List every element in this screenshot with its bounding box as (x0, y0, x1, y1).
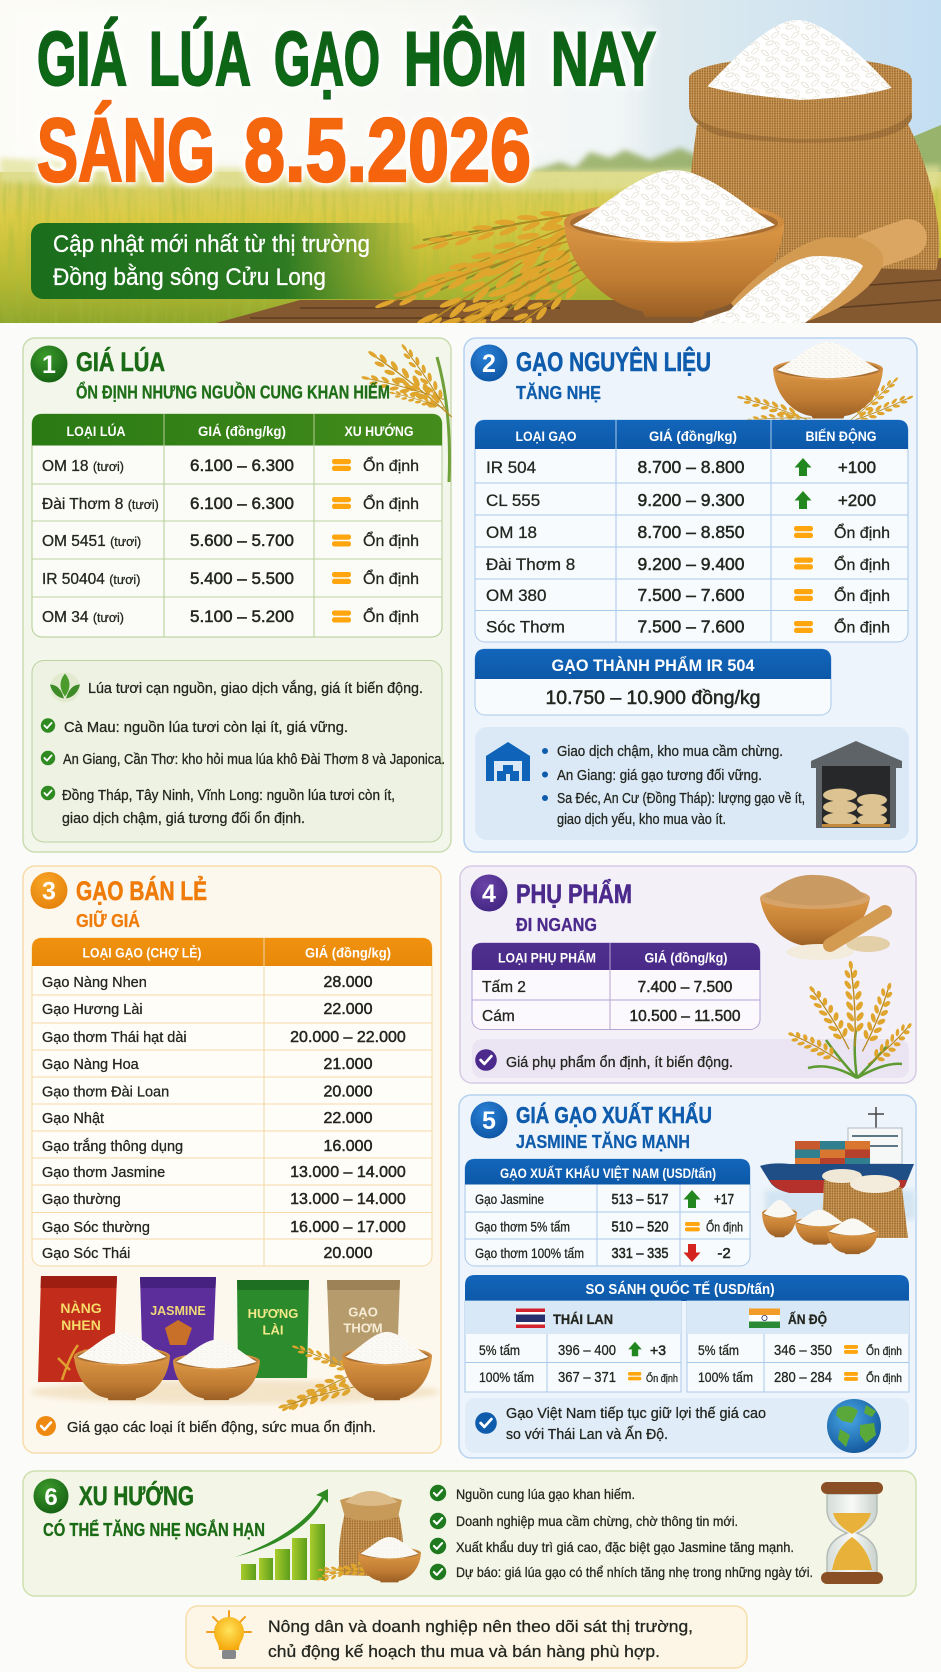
row Gạo trắng thông dụng: Gạo trắng thông dụng (42, 1138, 183, 1155)
bullet list: Giao dịch chậm, kho mua cầm chừng. (557, 744, 783, 760)
row Sóc Thơm: Sóc Thơm (486, 618, 565, 636)
row Đài Thơm 8: Đài Thơm 8 (486, 555, 575, 574)
hero title line 2: SÁNG (37, 100, 215, 201)
row Gạo Nàng Nhen (42, 974, 373, 991)
bullet Cà Mau: Cà Mau: nguồn lúa tươi còn lại ít, giá vững. (64, 720, 348, 736)
row OM 34: Ổn định (363, 607, 419, 626)
row Cám: Cám (482, 1008, 515, 1025)
note: so với Thái Lan và Ấn Độ. (506, 1426, 668, 1443)
badge 4: 4 (482, 880, 496, 908)
India column: 280 – 284 (774, 1370, 832, 1386)
panel 3: gạo bán lẻ (23, 866, 441, 1453)
rice plant (785, 960, 921, 1078)
sack and bowl illustration (315, 1491, 421, 1583)
row OM 34: 5.100 – 5.200 (190, 607, 294, 626)
international comparison table (465, 1275, 909, 1392)
row Đài Thơm 8: Ổn định (363, 494, 419, 513)
row Gạo thường: Gạo thường (42, 1192, 121, 1208)
table header (516, 427, 877, 444)
row Gạo Nàng Nhen: 28.000 (324, 974, 373, 991)
India column: Ổn định (866, 1343, 902, 1358)
note box: Lúa tươi cạn nguồn, giao dịch vắng, giá ít biến động. (88, 680, 423, 697)
row Gạo thơm Thái hạt dài: 20.000 – 22.000 (290, 1029, 406, 1046)
row Đài Thơm 8: 6.100 – 6.300 (190, 494, 294, 513)
hero title line 1: GẠO (274, 17, 380, 102)
tip text (268, 1617, 693, 1661)
bag: Jasmine (140, 1277, 216, 1380)
row CL 555: 9.200 – 9.300 (637, 490, 745, 510)
badge 6: 6 (44, 1484, 58, 1511)
subheading: TĂNG NHẸ (516, 382, 601, 403)
hero subtitle box (31, 223, 420, 299)
badge 2 (470, 344, 508, 382)
hero title line 2: 8.5.2026 (244, 101, 531, 201)
icon: hourglass (821, 1482, 883, 1584)
note box (475, 727, 909, 840)
row Gạo Hương Lài: Gạo Hương Lài (42, 1002, 143, 1018)
row Gạo Jasmine: 513 – 517 (612, 1191, 668, 1208)
rice bags and bowls illustration (30, 1276, 440, 1415)
bullet list: giao dịch yếu, kho mua vào ít. (557, 812, 726, 828)
subheading: ĐI NGANG (516, 915, 597, 935)
row CL 555: +200 (838, 491, 876, 510)
row Sóc Thơm: 7.500 – 7.600 (637, 616, 745, 636)
note: Giá gạo các loại ít biến động, sức mua ổn định. (67, 1419, 376, 1436)
heading: GẠO BÁN LẺ (76, 874, 207, 906)
row Cám: 10.500 – 11.500 (630, 1008, 741, 1025)
Thailand column: 5% tấm (479, 1343, 520, 1358)
Vietnam export table (465, 1159, 750, 1266)
row Đài Thơm 8: 9.200 – 9.400 (637, 554, 745, 574)
row OM 380: OM 380 (486, 586, 546, 605)
wooden scoop with rice (692, 237, 908, 323)
burlap sacks (822, 1169, 908, 1238)
row Đài Thơm 8 (42, 494, 419, 513)
heading: PHỤ PHẨM (516, 878, 632, 909)
Thailand column (479, 1308, 678, 1386)
note box (32, 660, 445, 842)
bag: Hương Lài: HƯƠNG (248, 1306, 298, 1321)
hero title line 1: HÔM (404, 17, 527, 102)
row Sóc Thơm: Ổn định (834, 618, 890, 636)
table header: LOẠI GẠO (CHỢ LẺ) (82, 944, 202, 960)
note: Gạo Việt Nam tiếp tục giữ lợi thế giá cao (506, 1405, 766, 1422)
row IR 50404: IR 50404 (tươi) (42, 571, 140, 588)
bag: Nàng Nhen (38, 1276, 117, 1382)
row Gạo thường (42, 1191, 406, 1208)
badge 3: 3 (42, 878, 56, 906)
hero banner (0, 0, 941, 323)
bullet 4: Dự báo: giá lúa gạo có thể nhích tăng nhẹ trong những ngày tới. (456, 1564, 813, 1580)
panel 6: xu hướng (23, 1471, 916, 1596)
row CL 555 (486, 490, 876, 510)
bowls (74, 1332, 170, 1400)
row OM 380 (486, 585, 890, 605)
bullet list: Sa Đéc, An Cư (Đồng Tháp): lượng gạo về ít, (557, 791, 805, 807)
row Gạo Sóc Thái: Gạo Sóc Thái (42, 1246, 130, 1262)
heading: XU HƯỚNG (79, 1480, 194, 1511)
India column: 5% tấm (698, 1343, 739, 1358)
row Gạo Nàng Hoa: 21.000 (324, 1056, 373, 1073)
finished rice IR 504 box: GẠO THÀNH PHẨM IR 504 (552, 656, 755, 675)
row Gạo Nhật: Gạo Nhật (42, 1111, 104, 1127)
hero title line 1: NAY (551, 17, 656, 102)
row IR 504: 8.700 – 8.800 (637, 457, 745, 477)
finished rice IR 504 box (475, 649, 831, 715)
row Gạo trắng thông dụng (42, 1138, 373, 1155)
icon: globe (827, 1399, 881, 1453)
bullet 3: Xuất khẩu duy trì giá cao, đặc biệt gạo Jasmine tăng mạnh. (456, 1539, 794, 1555)
bag: Nàng Nhen: NHEN (61, 1317, 101, 1333)
bullet Đồng Tháp: giao dịch chậm, giá tương đối ổn định. (62, 811, 305, 827)
table header: XU HƯỚNG (344, 422, 414, 439)
row Gạo Nàng Nhen: Gạo Nàng Nhen (42, 975, 147, 991)
bran bowl with scoop (760, 875, 890, 960)
row IR 504 (486, 457, 876, 477)
retail price table (32, 938, 432, 1266)
icon: leaf (50, 672, 80, 702)
bullet An Giang: An Giang, Cần Thơ: kho hỏi mua lúa khô Đài Thơm 8 và Japonica. (63, 752, 445, 768)
row OM 18 (42, 456, 419, 475)
subheading: CÓ THỂ TĂNG NHẸ NGẮN HẠN (43, 1519, 265, 1540)
subheading: GIỮ GIÁ (76, 910, 140, 931)
badge 4 (470, 874, 508, 912)
row Gạo thơm 5% tấm: Ổn định (706, 1220, 743, 1234)
India column: 100% tấm (698, 1370, 753, 1385)
row Gạo thơm 100% tấm (475, 1244, 731, 1262)
bag: Nàng Nhen: NÀNG (60, 1300, 102, 1316)
row CL 555: CL 555 (486, 491, 540, 510)
row Gạo thơm Đài Loan (42, 1084, 373, 1100)
row IR 50404 (42, 569, 419, 588)
warehouse illustration (811, 741, 902, 828)
row OM 5451: OM 5451 (tươi) (42, 533, 141, 550)
subheading: ỔN ĐỊNH NHƯNG NGUỒN CUNG KHAN HIẾM (76, 382, 390, 402)
flag: Thailand (516, 1308, 545, 1328)
subheading: JASMINE TĂNG MẠNH (516, 1131, 690, 1152)
row IR 504: IR 504 (486, 458, 536, 477)
table header: GẠO XUẤT KHẨU VIỆT NAM (USD/tấn) (500, 1164, 716, 1181)
row OM 18 (486, 522, 890, 542)
row Gạo thơm 5% tấm: 510 – 520 (612, 1218, 668, 1236)
table header: LOẠI GẠO (516, 428, 577, 444)
India column: 346 – 350 (774, 1343, 832, 1359)
footer tip box (186, 1606, 747, 1668)
panel 4: phụ phẩm (460, 866, 921, 1083)
bullet list (430, 1485, 813, 1580)
note: Giá phụ phẩm ổn định, ít biến động. (506, 1054, 733, 1071)
heading: GẠO NGUYÊN LIỆU (516, 346, 711, 377)
heading: GIÁ LÚA (76, 346, 165, 377)
bag: Jasmine: JASMINE (150, 1304, 206, 1318)
wheat decoration (360, 337, 457, 482)
India column: Ổn định (866, 1370, 902, 1385)
table header: GIÁ (đồng/kg) (644, 950, 728, 966)
table header (498, 948, 728, 966)
growth arrow (235, 1489, 328, 1557)
row Gạo thơm 5% tấm (475, 1218, 743, 1236)
row Cám (482, 1008, 741, 1025)
bullet Đồng Tháp (41, 786, 395, 827)
row Gạo thơm 100% tấm: -2 (717, 1245, 731, 1262)
row Đài Thơm 8: Đài Thơm 8 (tươi) (42, 496, 159, 513)
tip text: chủ động kế hoạch thu mua và bán hàng phù hợp. (268, 1642, 660, 1661)
row OM 5451 (42, 531, 419, 550)
row IR 50404: 5.400 – 5.500 (190, 569, 294, 588)
hero title line 1: LÚA (149, 17, 251, 102)
row Gạo Hương Lài (42, 1001, 373, 1018)
badge 5 (470, 1102, 508, 1138)
bowl 3 (827, 1218, 878, 1254)
hero title line 2 (37, 100, 531, 201)
Thailand column: 396 – 400 (558, 1343, 616, 1359)
badge 1 (30, 346, 68, 382)
India column: ẤN ĐỘ (788, 1310, 827, 1327)
badge 3 (30, 872, 68, 909)
row OM 18: 8.700 – 8.850 (637, 522, 745, 542)
badge 2: 2 (482, 350, 496, 378)
row Gạo Nàng Hoa: Gạo Nàng Hoa (42, 1057, 140, 1073)
row Gạo thơm Jasmine: 13.000 – 14.000 (290, 1164, 406, 1181)
note (465, 1398, 909, 1453)
bag: Gạo Thơm: THƠM (343, 1320, 383, 1336)
row Gạo Sóc thường (42, 1219, 406, 1236)
row Sóc Thơm (486, 616, 890, 636)
row Gạo thơm Thái hạt dài: Gạo thơm Thái hạt dài (42, 1030, 187, 1046)
row Gạo Jasmine (475, 1190, 734, 1208)
wooden bowl of rice (564, 170, 784, 317)
row OM 18: OM 18 (tươi) (42, 458, 124, 475)
row Gạo Nhật (42, 1110, 373, 1127)
table header: SO SÁNH QUỐC TẾ (USD/tấn) (586, 1280, 775, 1298)
hero subtitle box: Cập nhật mới nhất từ thị trường (53, 231, 370, 258)
bowl 1 (762, 1200, 797, 1237)
row OM 380: 7.500 – 7.600 (637, 585, 745, 605)
bullet list: An Giang: giá gạo tương đối vững. (557, 768, 762, 784)
icon: warehouse (486, 742, 530, 781)
row Đài Thơm 8: Ổn định (834, 555, 890, 574)
Thailand column: THÁI LAN (553, 1311, 613, 1327)
wooden table (216, 258, 941, 323)
row OM 18: OM 18 (486, 523, 537, 542)
table header: GIÁ (đồng/kg) (198, 423, 286, 439)
Thailand column: Ổn định (646, 1372, 678, 1385)
row Gạo thơm 100% tấm: Gạo thơm 100% tấm (475, 1246, 584, 1261)
hero subtitle box: Đồng bằng sông Cửu Long (53, 264, 326, 291)
bag: Hương Lài (237, 1280, 309, 1378)
bowl with sheaves (735, 342, 917, 431)
bowl 3 (342, 1332, 432, 1400)
bag: Gạo Thơm (327, 1280, 400, 1365)
table header (66, 422, 414, 439)
row Gạo thơm Đài Loan: Gạo thơm Đài Loan (42, 1084, 169, 1100)
table header: GIÁ (đồng/kg) (305, 944, 391, 960)
note (472, 1039, 909, 1078)
panel 1: giá lúa (23, 337, 457, 852)
badge 5: 5 (482, 1107, 496, 1135)
row OM 18: Ổn định (834, 523, 890, 542)
row Gạo thơm 100% tấm: 331 – 335 (612, 1245, 668, 1262)
row OM 5451: 5.600 – 5.700 (190, 531, 294, 550)
row OM 5451: Ổn định (363, 531, 419, 550)
row OM 18: 6.100 – 6.300 (190, 456, 294, 475)
panel 5: giá gạo xuất khẩu (459, 1095, 916, 1458)
row OM 18: Ổn định (363, 456, 419, 475)
hero sky and rice field background (0, 0, 941, 323)
row Gạo Jasmine: Gạo Jasmine (475, 1192, 544, 1207)
row Gạo Sóc thường: 16.000 – 17.000 (290, 1219, 406, 1236)
price table (32, 414, 442, 637)
row OM 34: OM 34 (tươi) (42, 609, 124, 626)
bullet 2: Doanh nghiệp mua cầm chừng, chờ thông tin mới. (456, 1513, 738, 1529)
row Đài Thơm 8 (486, 554, 890, 574)
ship and rice illustration (760, 1107, 915, 1254)
row Gạo thơm Jasmine (42, 1164, 406, 1181)
row IR 504: +100 (838, 458, 876, 477)
icon: light bulb (207, 1611, 251, 1659)
price table (475, 420, 908, 642)
rice sheaf (375, 211, 588, 323)
tip text: Nông dân và doanh nghiệp nên theo dõi sát thị trường, (268, 1617, 693, 1636)
row Gạo Sóc Thái (42, 1245, 373, 1262)
burlap sack of rice (688, 20, 939, 270)
row Tấm 2 (482, 979, 733, 996)
India column (698, 1308, 902, 1386)
row Gạo trắng thông dụng: 16.000 (324, 1138, 373, 1155)
row Gạo Jasmine: +17 (714, 1191, 734, 1208)
row Gạo thơm 5% tấm: Gạo thơm 5% tấm (475, 1220, 570, 1234)
row Gạo thơm Đài Loan: 20.000 (324, 1084, 373, 1100)
row Gạo Hương Lài: 22.000 (324, 1001, 373, 1018)
finished rice IR 504 box: 10.750 – 10.900 đồng/kg (546, 688, 760, 709)
row Gạo thường: 13.000 – 14.000 (290, 1191, 406, 1208)
hero title line 1: GIÁ (37, 17, 127, 102)
row Tấm 2: 7.400 – 7.500 (638, 979, 733, 996)
bag: Hương Lài: LÀI (263, 1322, 283, 1338)
row OM 34 (42, 607, 419, 626)
badge 1: 1 (42, 351, 56, 379)
bullet 1: Nguồn cung lúa gạo khan hiếm. (456, 1486, 635, 1502)
row Gạo Nhật: 22.000 (324, 1110, 373, 1127)
bowl 2 (173, 1340, 260, 1400)
Thailand column: +3 (650, 1342, 666, 1358)
row Gạo thơm Jasmine: Gạo thơm Jasmine (42, 1165, 165, 1181)
bullet Đồng Tháp: Đồng Tháp, Tây Ninh, Vĩnh Long: nguồn lúa tươi còn ít, (62, 788, 395, 804)
table header: LOẠI PHỤ PHẨM (498, 948, 596, 966)
row Gạo Sóc thường: Gạo Sóc thường (42, 1220, 150, 1236)
row OM 380: Ổn định (834, 586, 890, 605)
Thailand column: 367 – 371 (558, 1370, 616, 1386)
table header: GIÁ (đồng/kg) (649, 428, 737, 444)
table header: LOẠI LÚA (66, 422, 126, 439)
heading: GIÁ GẠO XUẤT KHẨU (516, 1101, 712, 1128)
row Gạo Sóc Thái: 20.000 (324, 1245, 373, 1262)
row Tấm 2: Tấm 2 (482, 979, 526, 996)
row IR 50404: Ổn định (363, 569, 419, 588)
cargo ship (760, 1107, 914, 1193)
row Gạo Nàng Hoa (42, 1056, 373, 1073)
Thailand column: 100% tấm (479, 1370, 534, 1385)
bag: Gạo Thơm: GẠO (348, 1304, 378, 1320)
table header (82, 944, 391, 960)
bullet list (542, 744, 805, 828)
bowl 2 (795, 1210, 845, 1245)
table (472, 943, 760, 1030)
rice ears (276, 1335, 367, 1415)
badge 6 (34, 1478, 68, 1514)
growth bar chart (235, 1489, 328, 1580)
table header: BIẾN ĐỘNG (806, 427, 877, 444)
flag: India (749, 1308, 780, 1328)
panel 2: gạo nguyên liệu (464, 338, 917, 852)
hero title line 1 (37, 17, 656, 102)
row Gạo thơm Thái hạt dài (42, 1029, 406, 1046)
